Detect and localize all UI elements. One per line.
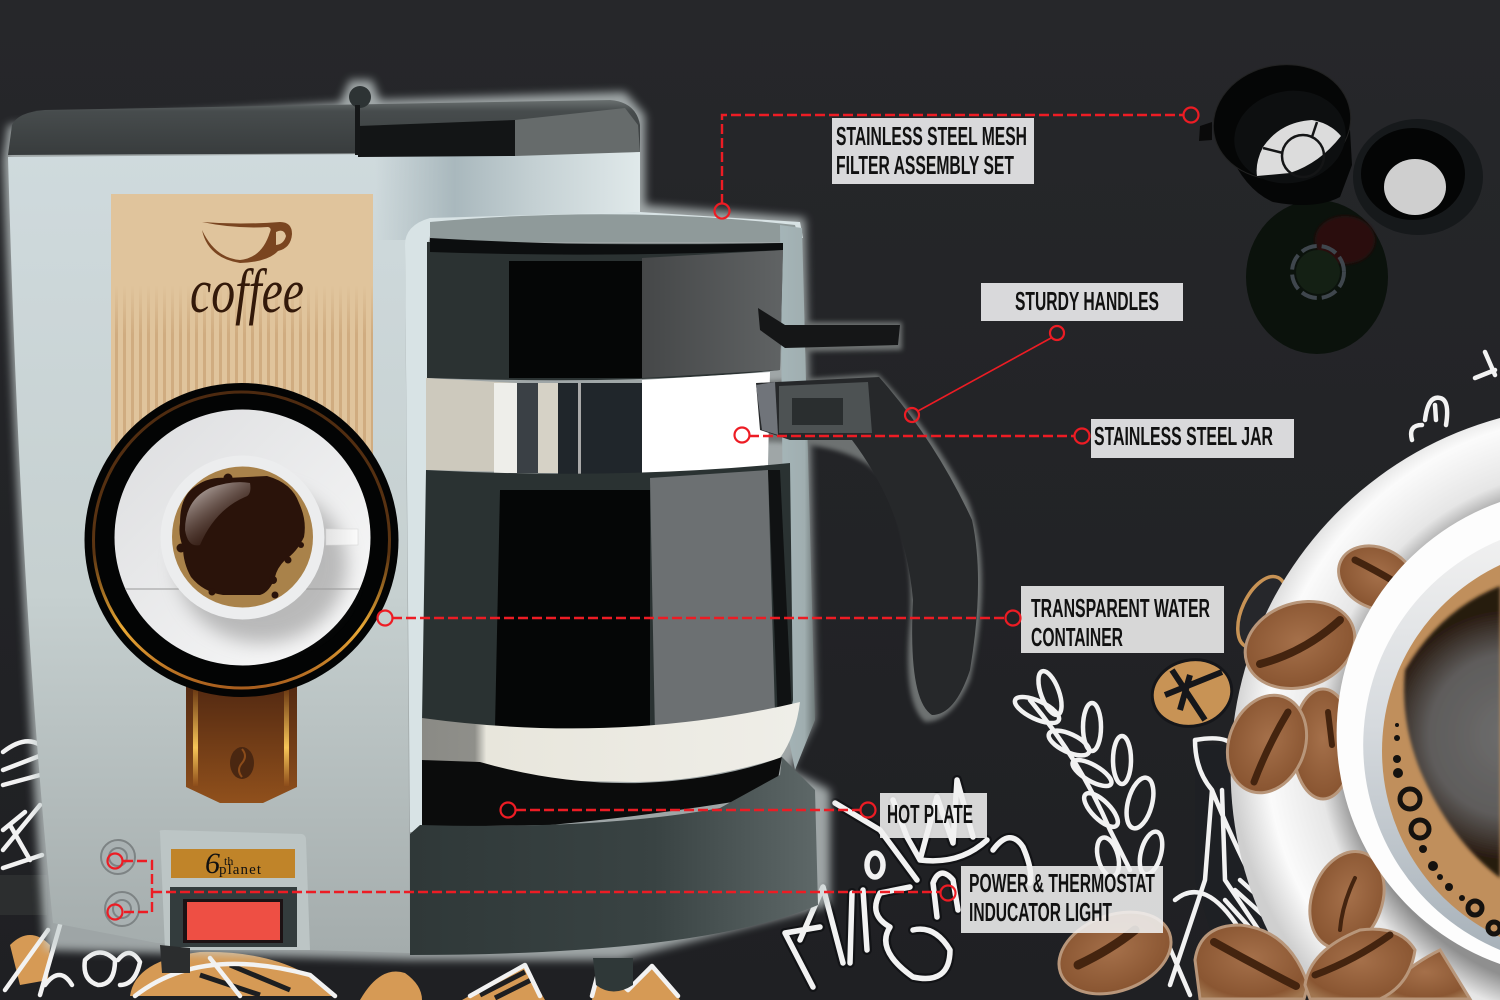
label: transparent water container xyxy=(1021,586,1224,653)
handle glow xyxy=(752,306,982,722)
jar handle lower xyxy=(756,377,978,715)
crema dots xyxy=(1393,723,1465,901)
label: transparent water container: TRANSPARENT WATER xyxy=(1031,593,1210,623)
under jar dark xyxy=(422,757,782,827)
coffee surface xyxy=(1404,586,1500,878)
control plate with logo xyxy=(160,830,310,950)
coffee script: coffee xyxy=(190,258,304,326)
label: stainless steel mesh filter assembly set xyxy=(832,118,1034,184)
lid right light xyxy=(515,108,640,156)
jar lid top xyxy=(430,214,800,242)
coffee branded panel xyxy=(111,194,373,484)
label: hot plate xyxy=(880,793,987,838)
jar lower xyxy=(422,463,793,731)
label: power and thermostat indicator light: INDUCATOR LIGHT xyxy=(969,897,1112,927)
label: stainless steel mesh filter assembly set: FILTER ASSEMBLY SET xyxy=(836,150,1014,180)
orange bean doodles xyxy=(1146,569,1296,734)
label: power and thermostat indicator light xyxy=(961,866,1163,933)
round cup badge xyxy=(84,383,398,803)
label: stainless steel jar: STAINLESS STEEL JAR xyxy=(1094,421,1273,451)
callout: hot plate xyxy=(500,802,876,818)
control plate with logo: th xyxy=(224,854,233,868)
upper right body highlight xyxy=(375,152,640,240)
filter assembly photo xyxy=(1199,54,1483,354)
control plate with logo: 6 xyxy=(205,847,220,880)
control plate with logo: planet xyxy=(219,862,262,878)
crema bubbles xyxy=(1400,789,1500,934)
lettering scribble halo xyxy=(785,780,1031,987)
icon: coffee cup logo xyxy=(202,222,292,263)
steel band xyxy=(426,372,770,480)
label: stainless steel jar xyxy=(1091,419,1294,458)
plug stub xyxy=(160,945,190,973)
glow around body xyxy=(3,80,830,960)
icon: coffee bean mark xyxy=(230,747,254,779)
lid dark block xyxy=(358,120,515,157)
label: sturdy handles xyxy=(981,283,1183,321)
cup outer rim xyxy=(1337,502,1500,964)
label: sturdy handles: STURDY HANDLES xyxy=(1015,286,1159,316)
chalk doodles bottom left xyxy=(0,741,680,1000)
shadow band and foot xyxy=(593,958,633,992)
callout: power xyxy=(108,854,956,920)
jar base steel xyxy=(422,702,800,782)
coffee beans cluster xyxy=(1048,534,1470,1000)
base part xyxy=(1246,200,1388,354)
label: stainless steel mesh filter assembly set: STAINLESS STEEL MESH xyxy=(836,121,1027,151)
callout: handles xyxy=(905,326,1064,422)
chalk doodle: bottle and hatch xyxy=(1160,352,1495,995)
right edge reflection xyxy=(780,225,815,770)
callout lines xyxy=(108,108,1198,920)
crema xyxy=(1382,565,1500,937)
ring part xyxy=(1353,119,1483,235)
callout: jar xyxy=(734,428,1090,444)
callout: water container xyxy=(378,610,1020,626)
branch xyxy=(1011,668,1166,879)
big coffee saucer xyxy=(1231,418,1500,1000)
callout: filter xyxy=(714,108,1198,218)
label: transparent water container: CONTAINER xyxy=(1031,622,1123,652)
lid top xyxy=(8,100,640,155)
cup inner wall xyxy=(1363,540,1500,950)
chalk doodles centre xyxy=(785,668,1166,987)
side frame xyxy=(405,212,803,832)
lettering scribble xyxy=(785,780,1031,987)
label: power and thermostat indicator light: POWER & THERMOSTAT xyxy=(969,868,1155,898)
knobs xyxy=(101,840,139,926)
power cord xyxy=(0,875,47,915)
body housing xyxy=(8,152,640,953)
jar upper xyxy=(427,242,783,380)
label: hot plate: HOT PLATE xyxy=(887,799,973,829)
big coffee cup xyxy=(1337,502,1500,964)
lettering ring xyxy=(867,853,883,877)
cup part xyxy=(1204,54,1360,205)
lid knob xyxy=(349,86,371,108)
hot plate xyxy=(410,757,818,955)
jar handle upper xyxy=(758,308,900,348)
filter tab xyxy=(1199,122,1212,141)
coffee maker xyxy=(3,80,982,992)
